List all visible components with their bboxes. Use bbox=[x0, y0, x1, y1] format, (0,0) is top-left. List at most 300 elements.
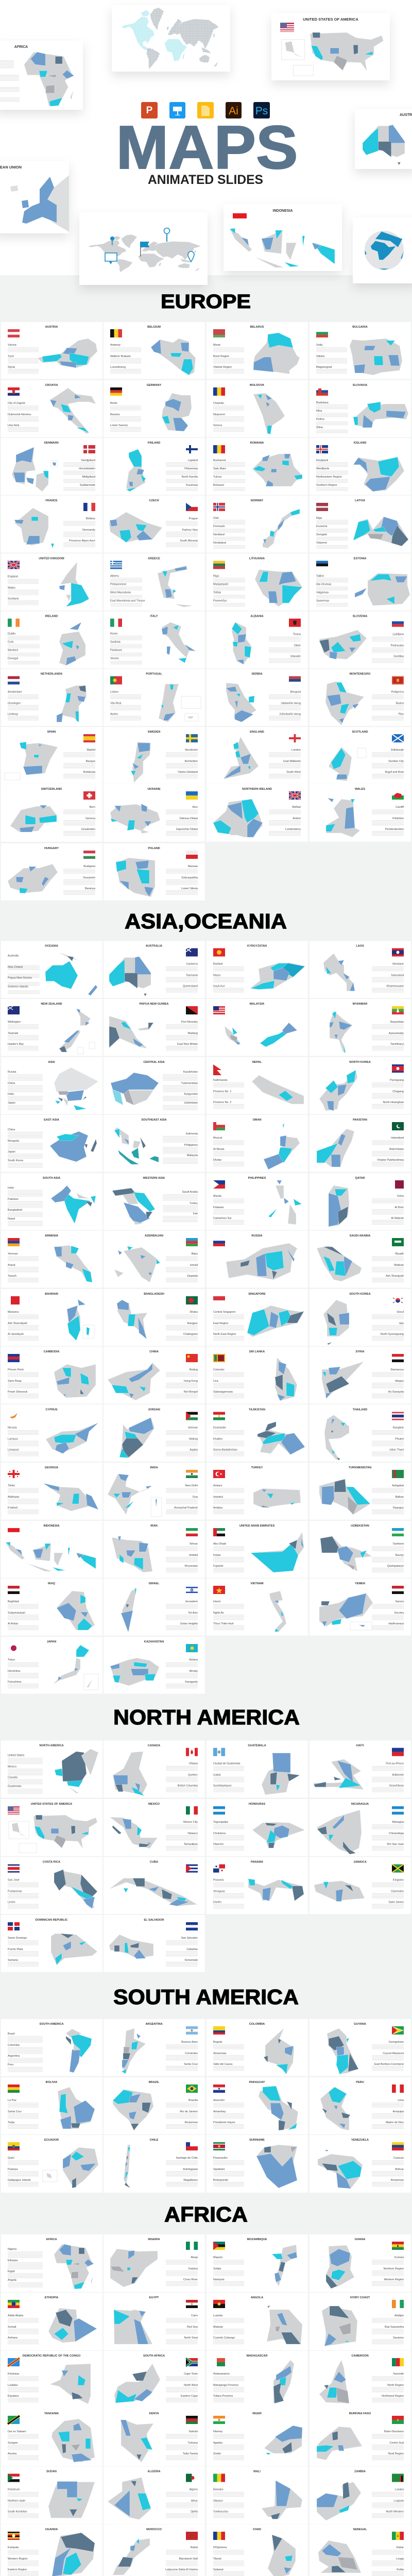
list: Managua bbox=[392, 1821, 404, 1824]
list: Kinshasa bbox=[8, 2372, 19, 2376]
list bbox=[163, 1132, 198, 1164]
list: Cape Town bbox=[184, 2372, 198, 2376]
map bbox=[323, 1300, 349, 1345]
map bbox=[256, 2145, 297, 2188]
flag bbox=[8, 2416, 20, 2424]
map bbox=[272, 2245, 297, 2286]
map bbox=[353, 457, 404, 492]
title: LITHUANIA bbox=[249, 557, 265, 561]
flag bbox=[8, 2300, 20, 2308]
panel: Mozambique bbox=[207, 2234, 308, 2292]
list: Nairobi bbox=[189, 2430, 198, 2433]
list: Georgetown bbox=[389, 2041, 404, 2044]
panel: Uzbekistan bbox=[310, 1521, 411, 1578]
flag bbox=[316, 445, 328, 453]
flag bbox=[392, 2242, 404, 2250]
title: PARAGUAY bbox=[249, 2081, 265, 2084]
list: Baranya bbox=[85, 887, 95, 890]
list: Canberra bbox=[186, 962, 198, 965]
flag bbox=[8, 676, 20, 684]
list: Province No. 2 bbox=[213, 1101, 231, 1104]
map bbox=[14, 508, 54, 548]
panel: Iraq bbox=[1, 1579, 102, 1635]
list: Wexford bbox=[8, 649, 18, 652]
panel: Norway bbox=[207, 496, 308, 552]
list: Jeju bbox=[399, 1322, 404, 1325]
panel: Bolivia bbox=[1, 2077, 102, 2134]
list: Limassol bbox=[8, 1449, 19, 1452]
map bbox=[318, 2150, 363, 2189]
panel: Asia bbox=[1, 1057, 102, 1114]
list: Almaty bbox=[190, 1670, 198, 1673]
map bbox=[250, 962, 305, 989]
flag bbox=[8, 1806, 20, 1815]
map bbox=[322, 1362, 364, 1399]
title: CUBA bbox=[150, 1861, 158, 1864]
map bbox=[319, 1593, 373, 1630]
list: Baghdad bbox=[8, 1600, 19, 1603]
list bbox=[213, 1368, 244, 1398]
map bbox=[226, 683, 256, 722]
list bbox=[8, 1071, 43, 1111]
list: Sardinia bbox=[110, 641, 121, 644]
flag bbox=[316, 332, 328, 337]
panel: North Korea bbox=[310, 1057, 411, 1114]
title: GUATEMALA bbox=[248, 1744, 266, 1748]
list bbox=[213, 2041, 244, 2071]
list: Ararat bbox=[8, 1264, 15, 1267]
title: SUDAN bbox=[46, 2470, 57, 2473]
list: Grand'Anse bbox=[389, 1785, 404, 1788]
title: YEMEN bbox=[355, 1582, 365, 1585]
flag bbox=[186, 2300, 198, 2308]
map bbox=[114, 2364, 160, 2403]
list: Turkey bbox=[190, 1202, 198, 1205]
list bbox=[8, 575, 39, 605]
flag bbox=[8, 1528, 20, 1536]
list: Ida-Virumaa bbox=[316, 583, 331, 586]
panel: Democratic Republic of the Congo bbox=[1, 2351, 102, 2409]
map bbox=[5, 742, 58, 780]
flag bbox=[392, 2474, 404, 2482]
panel: Dominican Republic bbox=[1, 1915, 102, 1972]
panel: Guyana bbox=[310, 2019, 411, 2076]
flag bbox=[213, 1586, 225, 1594]
title: HONDURAS bbox=[249, 1803, 265, 1806]
list: Palawan bbox=[213, 1206, 224, 1209]
map bbox=[268, 1180, 302, 1225]
card: United States of America bbox=[271, 13, 390, 80]
list: North Sinai bbox=[184, 2336, 198, 2340]
panel: Venezuela bbox=[310, 2135, 411, 2193]
flag bbox=[213, 1748, 225, 1756]
title: GUYANA bbox=[354, 2023, 366, 2026]
list: Tamaulipas bbox=[184, 1843, 198, 1846]
list: Nghệ An bbox=[213, 1612, 224, 1615]
list bbox=[8, 1879, 39, 1909]
list bbox=[8, 1426, 39, 1456]
title: SLOVENIA bbox=[353, 615, 367, 618]
list: Al Anbar bbox=[8, 1622, 19, 1625]
title: OMAN bbox=[252, 1118, 262, 1122]
list: Antofagasta bbox=[183, 2168, 198, 2171]
list: Nord Region bbox=[388, 2452, 404, 2455]
map bbox=[57, 685, 87, 722]
panel: Austria bbox=[1, 322, 102, 379]
map bbox=[318, 2540, 361, 2573]
list bbox=[372, 1252, 404, 1282]
flag bbox=[8, 1865, 20, 1873]
panel: France bbox=[1, 496, 102, 552]
panel: Jordan bbox=[104, 1404, 205, 1462]
list: City of Zagreb bbox=[8, 402, 25, 405]
list bbox=[372, 2430, 404, 2460]
flag bbox=[392, 734, 404, 742]
title: SOUTH AMERICA bbox=[39, 2023, 64, 2026]
panel: Niger bbox=[207, 2409, 308, 2466]
map bbox=[111, 1073, 159, 1105]
list: Stockholm bbox=[185, 749, 198, 752]
flag bbox=[392, 1748, 404, 1756]
list: Sofia bbox=[316, 344, 322, 347]
map bbox=[38, 338, 97, 368]
list: N'Djamena bbox=[213, 2546, 227, 2549]
map bbox=[54, 1364, 96, 1398]
list: Scotland bbox=[8, 598, 19, 601]
list bbox=[8, 1937, 39, 1967]
title: ARMENIA bbox=[45, 1234, 58, 1238]
list: Malaysia bbox=[187, 1154, 198, 1157]
map bbox=[51, 1934, 97, 1965]
list: Laâyoune-Sakia El Hamra bbox=[165, 2568, 198, 2571]
list: Tarija bbox=[8, 2121, 14, 2124]
panel: Egypt bbox=[104, 2293, 205, 2350]
panel: Finland bbox=[104, 438, 205, 495]
list bbox=[166, 865, 198, 895]
panel: Slovenia bbox=[310, 612, 411, 668]
flag bbox=[8, 387, 20, 396]
list: San Salvador bbox=[181, 1937, 198, 1940]
list: Vila Real bbox=[110, 702, 121, 705]
list bbox=[166, 2488, 198, 2518]
title: KAZAKHSTAN bbox=[144, 1640, 164, 1643]
title: WESTERN ASIA bbox=[143, 1177, 165, 1180]
list: Vienna bbox=[8, 344, 16, 347]
list: Warsaw bbox=[188, 865, 198, 868]
title: SOUTH AFRICA bbox=[143, 2354, 165, 2358]
list bbox=[213, 1879, 244, 1909]
list: Santo Domingo bbox=[8, 1937, 27, 1940]
list: Aveiro bbox=[110, 713, 118, 716]
title: TURKEY bbox=[251, 1466, 263, 1469]
panel: Vietnam bbox=[207, 1579, 308, 1635]
panel: Belgium bbox=[104, 322, 205, 379]
list: Budva bbox=[396, 702, 404, 705]
title: HAITI bbox=[356, 1744, 364, 1748]
card: Africa: AFRICA bbox=[14, 45, 28, 49]
list: Madre de Dios bbox=[386, 2121, 404, 2124]
flag bbox=[392, 1586, 404, 1594]
heading: Africa: AFRICA bbox=[164, 2202, 248, 2226]
title: ICELAND bbox=[354, 442, 366, 445]
flag bbox=[8, 329, 20, 337]
panel: Slovakia bbox=[310, 380, 411, 437]
list: Tanintharyi bbox=[390, 1043, 404, 1046]
list: Valgamaa bbox=[316, 591, 329, 595]
list: Egypt bbox=[8, 2270, 15, 2273]
panel: Kyrgyzstan bbox=[207, 941, 308, 998]
panel: Romania bbox=[207, 438, 308, 495]
title: UNITED ARAB EMIRATES bbox=[239, 1524, 274, 1528]
list: Finnmark bbox=[213, 525, 225, 528]
list: Eastern Region bbox=[8, 2568, 27, 2571]
list bbox=[8, 633, 40, 665]
map bbox=[52, 2533, 95, 2576]
title: BAHRAIN bbox=[45, 1293, 58, 1296]
list bbox=[8, 2157, 39, 2187]
flag bbox=[392, 1470, 404, 1478]
list bbox=[372, 633, 404, 663]
panel: Singapore bbox=[207, 1289, 308, 1346]
list: Chișinău bbox=[213, 402, 224, 405]
heading: Europe: EUROPE bbox=[161, 291, 251, 313]
panel: Uganda bbox=[1, 2524, 102, 2576]
flag bbox=[186, 1296, 198, 1304]
list: England bbox=[8, 575, 18, 578]
list bbox=[166, 2372, 198, 2402]
title: DOMINICAN REPUBLIC bbox=[36, 1919, 67, 1922]
list: East Region bbox=[213, 1322, 228, 1325]
list: London bbox=[291, 749, 301, 752]
list: North West bbox=[184, 2384, 198, 2387]
panel: Burkina Faso bbox=[310, 2409, 411, 2466]
list: Bucharest bbox=[213, 459, 226, 462]
list bbox=[166, 2041, 198, 2071]
panel: El Salvador bbox=[104, 1915, 205, 1972]
list: Tallinn bbox=[316, 575, 324, 578]
title: ENGLAND bbox=[250, 731, 264, 734]
list: Zinder bbox=[213, 2452, 221, 2455]
list: Cuando Cubango bbox=[213, 2336, 235, 2340]
flag bbox=[110, 561, 122, 569]
map bbox=[54, 1870, 97, 1909]
title: GEORGIA bbox=[45, 1466, 58, 1469]
map bbox=[320, 2087, 350, 2130]
flag bbox=[316, 561, 328, 566]
flag bbox=[186, 1412, 198, 1420]
list: Hawke's Bay bbox=[8, 1043, 24, 1046]
panel: Nicaragua bbox=[310, 1799, 411, 1856]
list: Beograd bbox=[290, 690, 301, 693]
list: Hong Kong bbox=[184, 1380, 198, 1383]
list: Brokopondo bbox=[213, 2179, 228, 2182]
list: Nordland bbox=[213, 533, 225, 536]
list: Solomon Islands bbox=[8, 985, 28, 988]
title: EAST ASIA bbox=[44, 1118, 59, 1122]
title: COSTA RICA bbox=[43, 1861, 60, 1864]
panel: Turkey bbox=[207, 1463, 308, 1520]
list: Edinburgh bbox=[391, 749, 404, 752]
list bbox=[8, 2546, 39, 2576]
title: POLAND bbox=[148, 847, 160, 850]
title: MAPS: MAPS bbox=[116, 113, 298, 182]
title: CENTRAL ASIA bbox=[143, 1061, 165, 1064]
flag bbox=[392, 1122, 404, 1130]
flag bbox=[289, 676, 301, 682]
flag bbox=[186, 1748, 198, 1756]
flag bbox=[392, 2532, 404, 2540]
list: Khuzestan bbox=[185, 1565, 198, 1568]
list: Niamey bbox=[213, 2430, 223, 2433]
map bbox=[317, 1246, 362, 1281]
list: Red Sea bbox=[187, 2326, 198, 2329]
list: Basque bbox=[86, 760, 95, 763]
list: Tirana bbox=[293, 633, 301, 636]
title: NETHERLANDS bbox=[41, 673, 62, 676]
list: Suchitepéquez bbox=[213, 1785, 232, 1788]
title: VENEZUELA bbox=[351, 2139, 369, 2142]
map bbox=[126, 449, 146, 492]
panel: England bbox=[207, 727, 308, 784]
card: dotted world map bbox=[112, 5, 230, 72]
panel: Poland bbox=[104, 843, 205, 901]
map bbox=[317, 1129, 354, 1167]
map bbox=[324, 1415, 349, 1460]
flag bbox=[186, 1006, 198, 1014]
list: Navoiy bbox=[396, 1554, 404, 1557]
flag bbox=[186, 445, 198, 453]
list: Tulcea bbox=[213, 476, 221, 479]
map bbox=[52, 2419, 95, 2462]
list bbox=[372, 806, 404, 836]
list: Siem Reap bbox=[8, 1380, 22, 1383]
map bbox=[224, 737, 259, 779]
list: Cairo bbox=[191, 2314, 198, 2317]
list bbox=[8, 1252, 39, 1282]
list: Golan Heights bbox=[180, 1622, 198, 1625]
panel: Argentina bbox=[104, 2019, 205, 2076]
panel: Africa bbox=[1, 2234, 102, 2292]
list: Reykjavík bbox=[316, 459, 329, 462]
flag bbox=[213, 2242, 225, 2250]
flag bbox=[213, 2084, 225, 2093]
list: Seoul bbox=[397, 1311, 404, 1314]
list: Río San Juan bbox=[387, 1843, 404, 1846]
list: South West bbox=[286, 771, 301, 774]
map bbox=[232, 622, 251, 665]
list: Australia bbox=[8, 954, 19, 957]
panel: Mexico bbox=[104, 1799, 205, 1856]
panel: Bahrain bbox=[1, 1289, 102, 1346]
title: UKRAINE bbox=[147, 788, 161, 791]
title: NORTHERN IRELAND bbox=[242, 788, 272, 791]
list: Al Wusta bbox=[213, 1148, 224, 1151]
flag bbox=[8, 1922, 20, 1930]
map bbox=[326, 798, 360, 837]
list bbox=[316, 344, 347, 374]
title: NEW ZEALAND bbox=[41, 1003, 62, 1006]
list: Riga bbox=[316, 517, 322, 520]
panel: Australia bbox=[104, 941, 205, 998]
list: Valle del Cauca bbox=[213, 2063, 232, 2066]
list: Styria bbox=[8, 366, 15, 369]
list: Lower Silesia bbox=[181, 887, 198, 890]
title: SWITZERLAND bbox=[41, 788, 62, 791]
list: South Moravia bbox=[180, 539, 198, 543]
list bbox=[372, 2157, 404, 2187]
panel: Morocco bbox=[104, 2524, 205, 2576]
map bbox=[317, 2427, 362, 2460]
flag bbox=[213, 387, 225, 396]
map bbox=[54, 1245, 92, 1282]
list: Abu Dhabi bbox=[213, 1543, 226, 1546]
list: Amazonas bbox=[185, 2121, 198, 2124]
title: TURKMENISTAN bbox=[349, 1466, 371, 1469]
map bbox=[50, 388, 96, 434]
list: Botoșani bbox=[213, 484, 224, 487]
list: Fujairah bbox=[213, 1565, 223, 1568]
map bbox=[55, 1749, 98, 1793]
list bbox=[213, 575, 245, 607]
list: Nepal bbox=[8, 1217, 15, 1221]
panel: Philippines bbox=[207, 1173, 308, 1230]
card: Indonesia: INDONESIA bbox=[273, 209, 293, 213]
list bbox=[269, 690, 301, 720]
list: Karaganty bbox=[185, 1681, 198, 1684]
map bbox=[43, 2147, 98, 2188]
list bbox=[163, 1191, 198, 1223]
panel: Wales bbox=[310, 784, 411, 842]
map bbox=[59, 1009, 95, 1054]
icon: Keynote bbox=[169, 102, 185, 118]
map bbox=[59, 562, 89, 607]
panel: Kenya bbox=[104, 2409, 205, 2466]
title: LAOS bbox=[356, 945, 364, 948]
flag bbox=[217, 2358, 225, 2366]
panel: Northern Ireland bbox=[207, 784, 308, 842]
panel: South America bbox=[1, 2019, 102, 2076]
list bbox=[316, 401, 348, 433]
list: Amambay bbox=[213, 2110, 226, 2113]
map bbox=[320, 1536, 372, 1571]
map bbox=[319, 630, 367, 659]
flag bbox=[213, 561, 225, 569]
title: AFRICA bbox=[46, 2238, 57, 2241]
title: UNITED STATES OF AMERICA bbox=[31, 1803, 72, 1806]
list bbox=[166, 1658, 198, 1688]
list: Podgorica bbox=[391, 690, 404, 693]
title: ISRAEL bbox=[149, 1582, 160, 1585]
list bbox=[63, 517, 95, 547]
map bbox=[48, 2481, 95, 2518]
list: Soroca bbox=[213, 424, 222, 427]
flag bbox=[186, 791, 198, 800]
list: Nampula bbox=[213, 2278, 225, 2281]
title: AZERBAIJAN bbox=[145, 1234, 163, 1238]
list: Naypyidaw bbox=[390, 1021, 404, 1024]
list: Brittany bbox=[86, 517, 95, 520]
title: MONTENEGRO bbox=[350, 673, 371, 676]
list: Kazakhstan bbox=[183, 1071, 198, 1074]
title: MALI bbox=[253, 2470, 261, 2473]
list bbox=[213, 2488, 244, 2518]
panel: Algeria bbox=[104, 2467, 205, 2524]
list: Norrbotten bbox=[185, 760, 198, 763]
list bbox=[213, 2256, 244, 2286]
list: Luanda bbox=[213, 2314, 222, 2317]
list: Maputo bbox=[213, 2256, 222, 2259]
list: Tombouctou bbox=[213, 2510, 228, 2513]
